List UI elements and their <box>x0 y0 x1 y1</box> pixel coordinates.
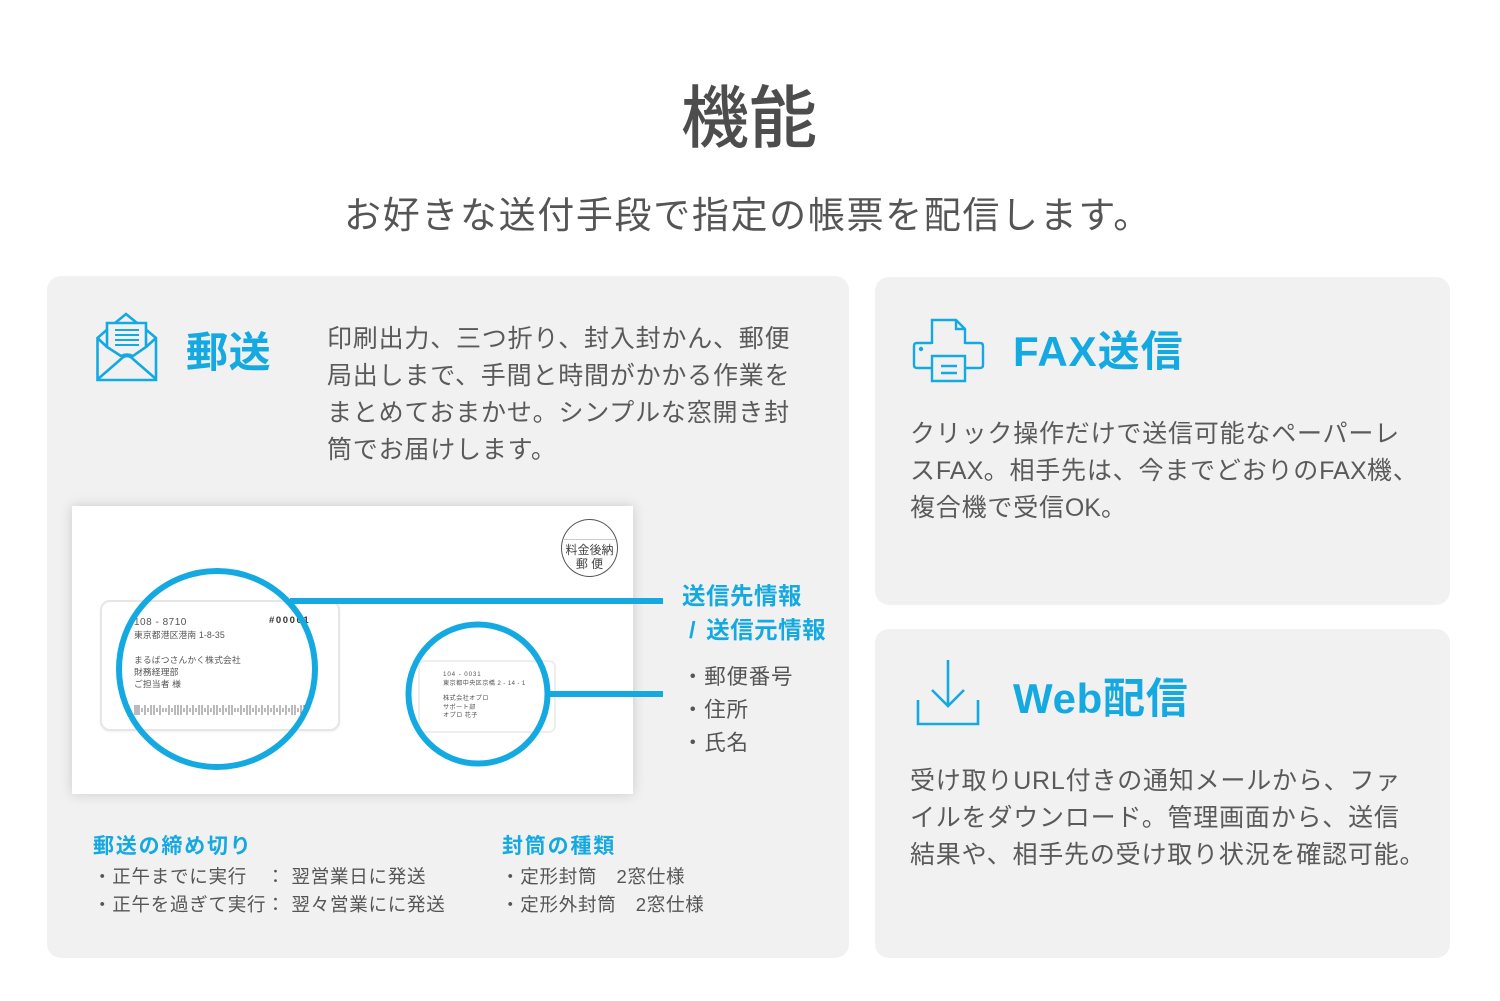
callout labels: 送信先情報 <box>682 583 802 609</box>
postal heading: 郵送 <box>186 329 271 376</box>
serial number: #00001 <box>269 615 310 626</box>
recipient address text <box>134 617 241 689</box>
recipient address text: 東京都港区港南 1-8-35 <box>134 630 225 640</box>
postal description: 印刷出力、三つ折り、封入封かん、郵便 <box>327 324 790 352</box>
recipient address text: ご担当者 様 <box>134 679 181 689</box>
web description <box>910 767 1425 869</box>
postage mark text <box>565 543 614 570</box>
fax description: 複合機で受信OK。 <box>910 494 1127 522</box>
postal description <box>327 324 790 464</box>
envelope type heading: 封筒の種類 <box>502 835 616 858</box>
address window: sender <box>418 660 556 733</box>
callout labels: / 送信元情報 <box>689 617 826 643</box>
recipient address text: 財務経理部 <box>134 667 178 677</box>
postage mark line <box>563 539 616 540</box>
icon: download <box>916 660 980 726</box>
web description: 結果や、相手先の受け取り状況を確認可能。 <box>910 841 1425 869</box>
address window: recipient <box>100 600 340 731</box>
sender address text <box>443 671 526 719</box>
sender address text: オプロ 花子 <box>443 712 478 719</box>
subtitle: お好きな送付手段で指定の帳票を配信します。 <box>344 195 1152 236</box>
sender address text: サポート部 <box>443 704 476 710</box>
mailing deadline text <box>93 866 446 914</box>
postage mark text: 郵 便 <box>576 556 603 570</box>
callout list: ・住所 <box>682 698 749 722</box>
callout list <box>682 665 793 755</box>
mailing deadline text: ・正午までに実行 ： 翌営業日に発送 <box>93 866 426 886</box>
fax description: クリック操作だけで送信可能なペーパーレ <box>910 420 1400 448</box>
barcode <box>134 705 304 715</box>
web description: イルをダウンロード。管理画面から、送信 <box>910 804 1400 832</box>
fax description: スFAX。相手先は、今までどおりのFAX機、 <box>910 457 1419 485</box>
callout list: ・郵便番号 <box>682 665 793 689</box>
icon: printer <box>912 318 984 382</box>
sender address text: 104 - 0031 <box>443 671 482 678</box>
panel: fax <box>875 277 1450 605</box>
panel: postal <box>47 276 849 958</box>
callout labels <box>682 583 826 643</box>
web description: 受け取りURL付きの通知メールから、ファ <box>910 767 1401 795</box>
web heading: Web配信 <box>1013 675 1188 722</box>
panel: web <box>875 629 1450 958</box>
fax heading: FAX送信 <box>1013 328 1184 375</box>
title: 機能 <box>681 81 817 157</box>
fax description <box>910 420 1419 522</box>
postage mark <box>561 519 618 577</box>
recipient address text: まるばつさんかく株式会社 <box>134 655 241 665</box>
callout list: ・氏名 <box>682 731 749 755</box>
magnifier circles and connector lines <box>116 568 663 770</box>
mailing deadline text: ・正午を過ぎて実行： 翌々営業にに発送 <box>93 894 446 914</box>
sender address text: 東京都中央区京橋 2 - 14 - 1 <box>443 680 526 686</box>
envelope type text: ・定形外封筒 2窓仕様 <box>501 894 705 914</box>
postal description: 局出しまで、手間と時間がかかる作業を <box>327 362 790 390</box>
postal description: まとめておまかせ。シンプルな窓開き封 <box>327 398 790 426</box>
envelope type text: ・定形封筒 2窓仕様 <box>501 866 685 886</box>
postage mark text: 料金後納 <box>565 543 614 557</box>
sender address text: 株式会社オプロ <box>443 695 489 702</box>
postal description: 筒でお届けします。 <box>327 436 557 464</box>
icon: envelope <box>96 312 158 382</box>
envelope type text <box>501 866 705 914</box>
mailing deadline heading: 郵送の締め切り <box>93 835 253 858</box>
recipient address text: 108 - 8710 <box>134 617 187 628</box>
envelope illustration <box>72 506 633 794</box>
